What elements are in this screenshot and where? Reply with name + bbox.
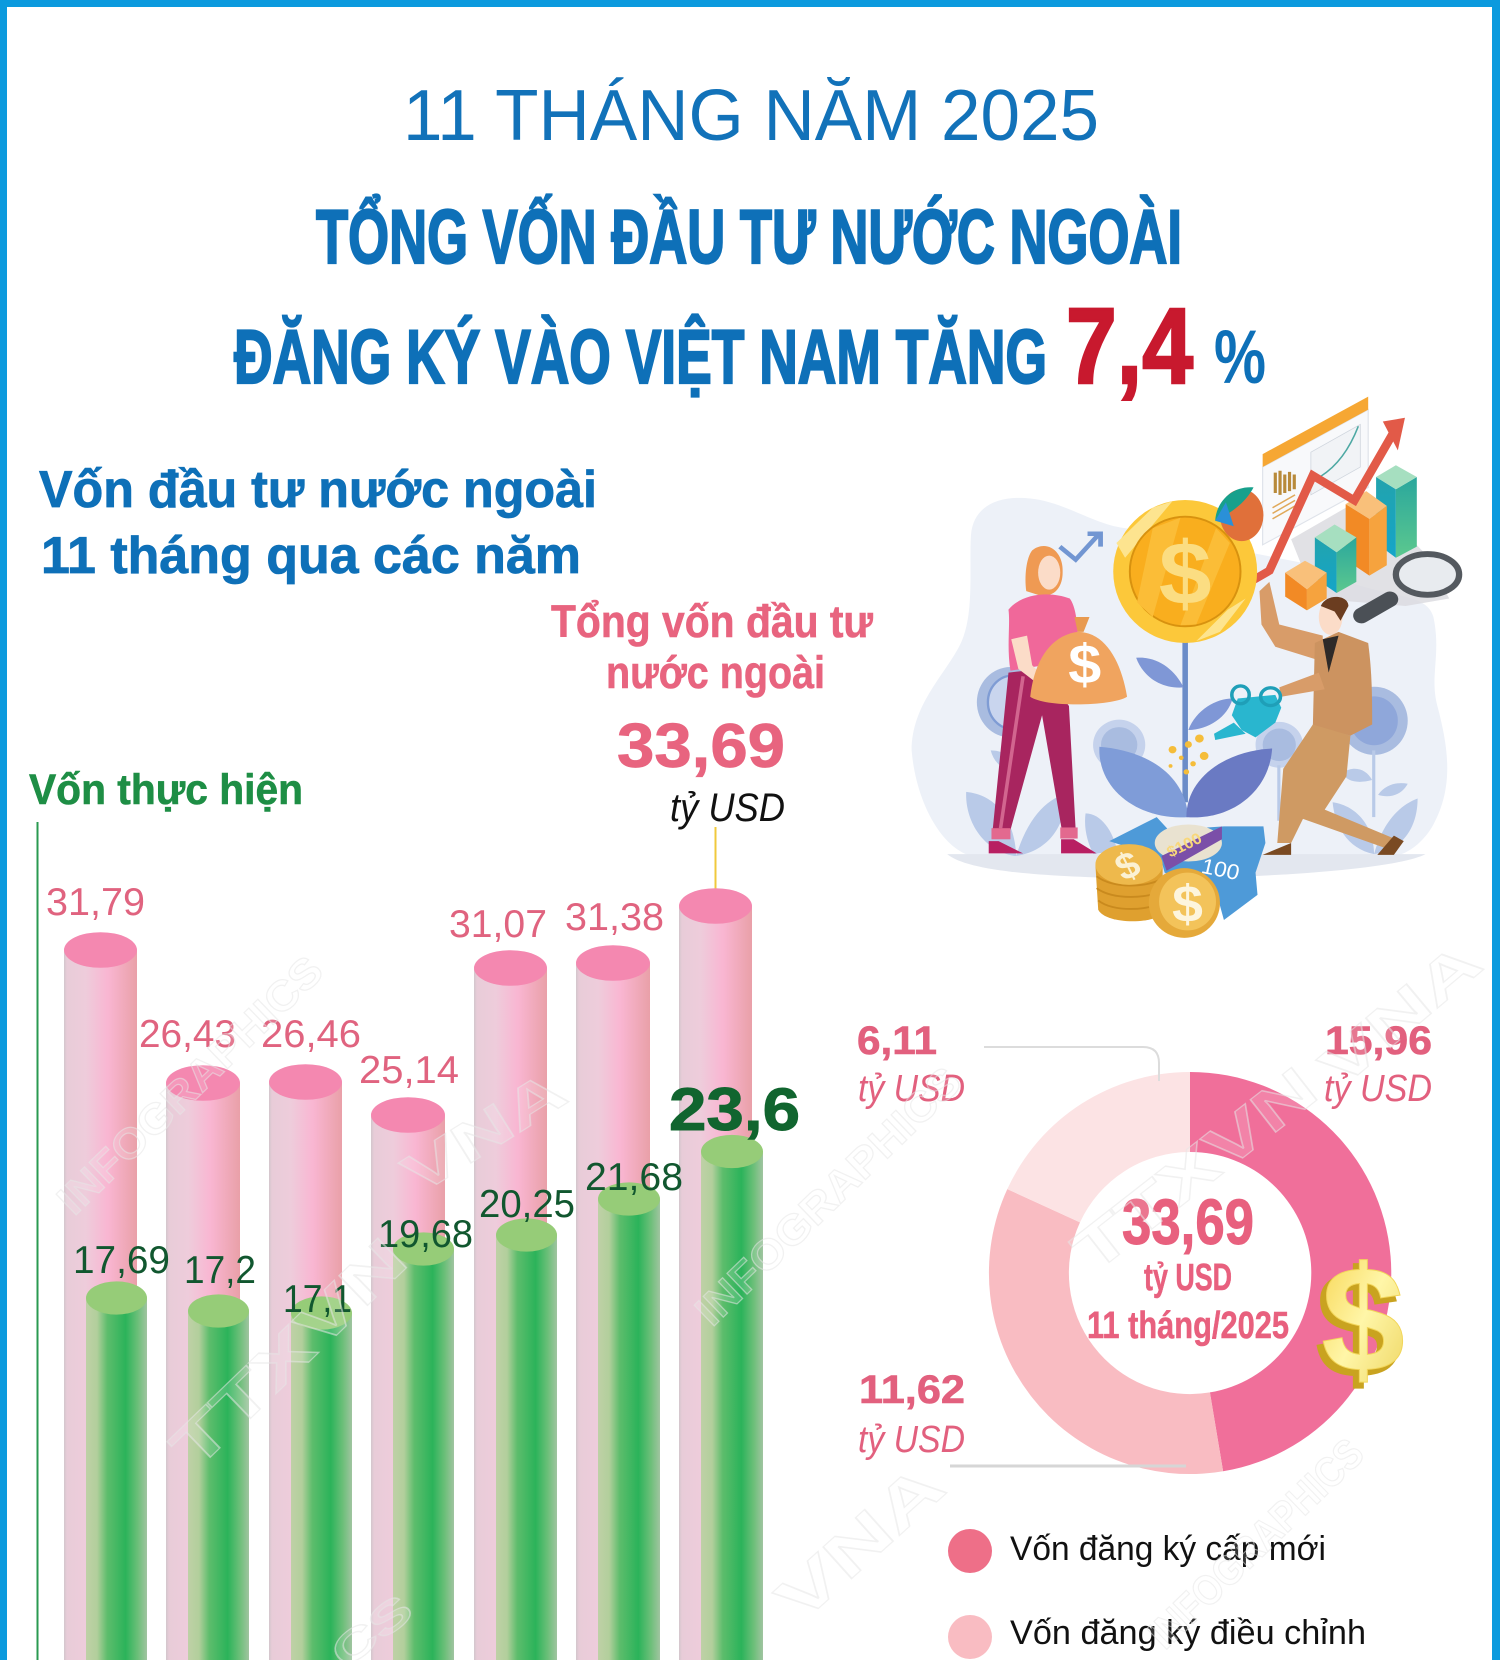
column group 4 bbox=[371, 1097, 454, 1660]
large bottom leaves bbox=[1099, 747, 1272, 817]
value: 15,96: 15,96 bbox=[1325, 1019, 1432, 1063]
leader line: 6,11 bbox=[984, 1047, 1159, 1081]
green series label: Vốn thực hiện bbox=[29, 766, 303, 814]
banknotes bbox=[1109, 817, 1265, 920]
cylinder bar chart bbox=[46, 881, 800, 1660]
value: 11,62: 11,62 bbox=[859, 1368, 965, 1412]
pink value labels bbox=[46, 881, 664, 1092]
icon: gold dollar sign: $ bbox=[1316, 1240, 1400, 1408]
donut value labels bbox=[857, 1019, 1432, 1461]
legend text: adjusted: Vốn đăng ký điều chỉnh bbox=[1010, 1614, 1366, 1652]
watermark text: VNA bbox=[1307, 929, 1493, 1099]
title line 3: ĐĂNG KÝ VÀO VIỆT NAM TĂNG bbox=[234, 314, 1047, 400]
green value labels: 17,1 bbox=[283, 1278, 352, 1321]
pink value labels: 26,46 bbox=[261, 1013, 361, 1056]
unit: 11,62: tỷ USD bbox=[858, 1419, 965, 1461]
donut centre period: 11 tháng/2025 bbox=[1087, 1305, 1289, 1347]
segment: new registered capital bbox=[1190, 1072, 1391, 1471]
heading line 2: 11 tháng qua các năm bbox=[41, 527, 581, 585]
unit: 6,11: tỷ USD bbox=[858, 1068, 965, 1110]
title percent sign: % bbox=[1214, 315, 1266, 400]
value: 6,11: 6,11 bbox=[857, 1019, 937, 1063]
watermark text: VNA bbox=[391, 1057, 577, 1206]
small blue trend arrow bbox=[1060, 534, 1101, 560]
3D bar group bbox=[1285, 465, 1417, 610]
chart window bbox=[1263, 397, 1368, 545]
green value labels: 17,69 bbox=[73, 1239, 170, 1282]
watermark text bbox=[48, 929, 1493, 1660]
magnifier bbox=[1361, 554, 1459, 616]
pie chart icon bbox=[1215, 487, 1263, 541]
woman figure bbox=[989, 546, 1097, 853]
chart axis bbox=[36, 822, 38, 1660]
illustration: investors growing money bbox=[912, 397, 1459, 938]
plant stem bbox=[1182, 636, 1188, 802]
banknotes: 100 bbox=[1199, 854, 1242, 885]
pink value labels: 31,07 bbox=[449, 903, 547, 946]
green value labels: 21,68 bbox=[585, 1156, 683, 1199]
watermark text: INFOGRAPHICS bbox=[686, 1058, 970, 1334]
callout leader line bbox=[714, 827, 716, 890]
money bag: $ bbox=[1068, 634, 1101, 696]
title bbox=[234, 76, 1266, 406]
legend swatch: adjusted bbox=[948, 1615, 992, 1659]
shadow under chart window bbox=[1291, 495, 1449, 606]
watermark text: INFOGRAPHICS bbox=[48, 947, 332, 1223]
donut chart bbox=[950, 1047, 1391, 1474]
donut centre value: 33,69 bbox=[1122, 1186, 1254, 1258]
title highlight value: 7,4 bbox=[1066, 285, 1193, 406]
section heading bbox=[39, 461, 597, 585]
legend swatch: new bbox=[948, 1529, 992, 1573]
callout: total foreign investment bbox=[551, 596, 873, 890]
leader line: 11,62 bbox=[950, 1464, 1186, 1468]
plant leaves bbox=[1136, 658, 1233, 730]
highlighted value 23,6: 23,6 bbox=[669, 1076, 800, 1143]
green value labels: 19,68 bbox=[378, 1213, 473, 1256]
gold coin: $ bbox=[1159, 525, 1212, 623]
man figure bbox=[1259, 582, 1404, 855]
pink value labels: 31,79 bbox=[46, 881, 145, 924]
column group 2 bbox=[166, 1065, 249, 1660]
title line 1: 11 THÁNG NĂM 2025 bbox=[403, 76, 1099, 156]
callout unit: tỷ USD bbox=[670, 786, 785, 830]
legend bbox=[948, 1529, 1366, 1659]
money bag bbox=[1030, 617, 1127, 704]
green value labels: 17,2 bbox=[184, 1249, 256, 1292]
unit: 15,96: tỷ USD bbox=[1324, 1068, 1432, 1110]
segment: capital contribution bbox=[1007, 1072, 1190, 1222]
watering can bbox=[1214, 686, 1281, 740]
legend text: new: Vốn đăng ký cấp mới bbox=[1010, 1530, 1326, 1568]
icon: gold dollar sign: $ bbox=[1321, 1235, 1405, 1403]
watermark text: INFOGRAPHICS bbox=[1139, 1429, 1373, 1657]
segment: adjusted capital bbox=[989, 1189, 1223, 1474]
front coin: $ bbox=[1172, 875, 1203, 933]
watermark text: TTXVN bbox=[1060, 1054, 1330, 1285]
pink value labels: 31,38 bbox=[565, 896, 664, 939]
callout value: 33,69 bbox=[617, 712, 785, 781]
callout label line 1: Tổng vốn đầu tư bbox=[551, 596, 873, 647]
ground shadow bbox=[947, 854, 1426, 878]
column group 1 bbox=[64, 932, 147, 1660]
column group 3 bbox=[269, 1064, 352, 1660]
callout label line 2: nước ngoài bbox=[606, 647, 825, 698]
donut centre unit: tỷ USD bbox=[1144, 1257, 1232, 1299]
pink value labels: 25,14 bbox=[359, 1049, 459, 1092]
banknotes: $100 bbox=[1164, 830, 1205, 861]
pink value labels: 26,43 bbox=[139, 1013, 236, 1056]
red growth arrow bbox=[1246, 418, 1405, 584]
background coin flowers bbox=[966, 667, 1418, 856]
heading line 1: Vốn đầu tư nước ngoài bbox=[39, 461, 597, 519]
column group 5 bbox=[474, 950, 557, 1660]
coin stack: $ bbox=[1108, 843, 1147, 890]
column group 7 bbox=[679, 888, 763, 1660]
coin stack bbox=[1095, 843, 1163, 921]
green value labels: 20,25 bbox=[479, 1183, 575, 1226]
front coin bbox=[1149, 868, 1220, 938]
water drops bbox=[1169, 734, 1208, 774]
green value labels bbox=[73, 1156, 683, 1321]
gold coin bbox=[1113, 500, 1257, 643]
watermark text: VNA bbox=[763, 1450, 958, 1635]
illustration background blob bbox=[912, 498, 1447, 856]
column group 6 bbox=[576, 945, 660, 1660]
watermark text: TTXVN bbox=[157, 1225, 420, 1481]
